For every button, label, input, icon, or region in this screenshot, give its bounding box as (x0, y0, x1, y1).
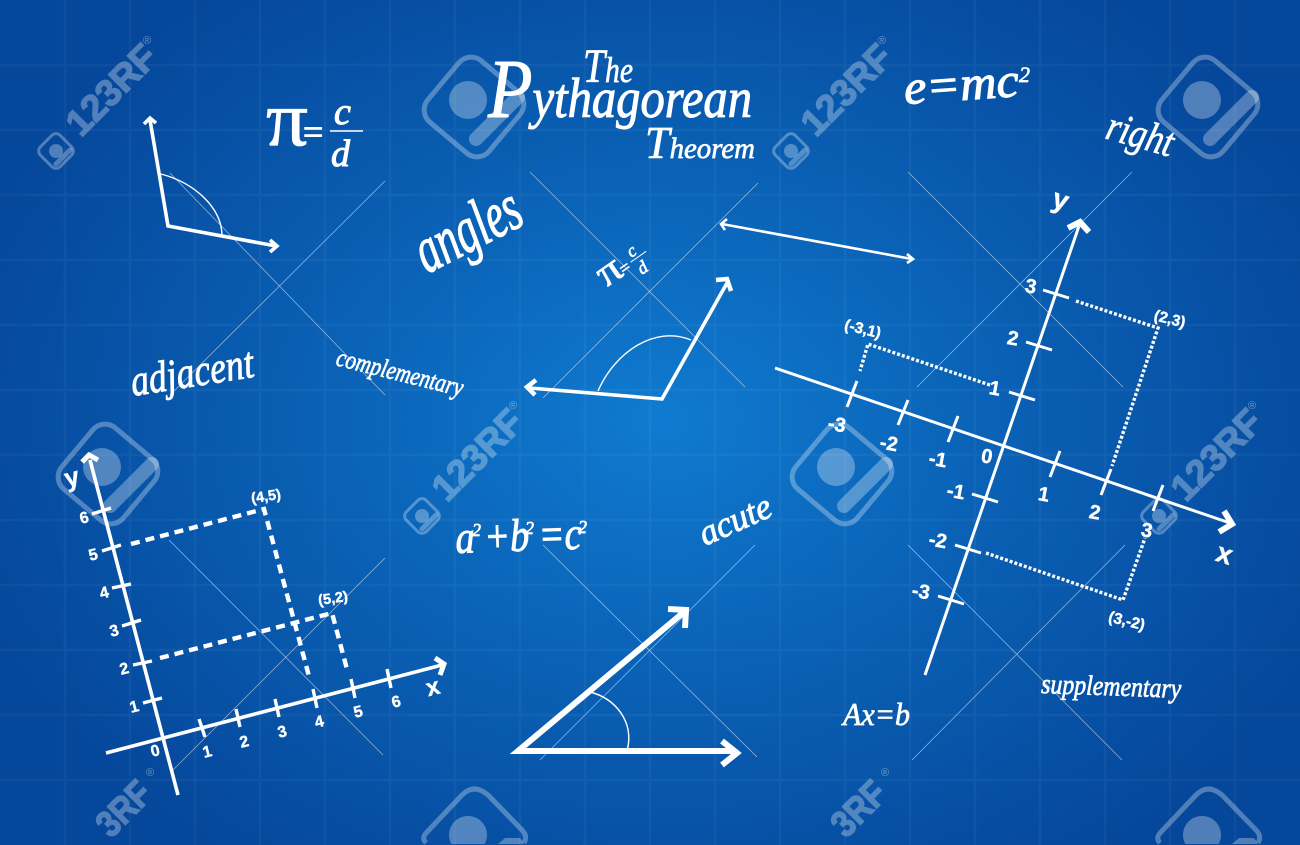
watermark: top left (36, 35, 165, 171)
formula: small rotated pi: π (585, 245, 631, 295)
watermark: middle centre: ® (509, 400, 517, 412)
watermark: middle right: 123RF (1163, 401, 1270, 509)
formula: small rotated pi: c (622, 240, 640, 261)
axis labels left: 5 (87, 546, 100, 565)
watermark: top centre right (771, 35, 900, 171)
coordinate chart left (61, 455, 444, 795)
watermark: top left: ® (143, 35, 151, 47)
axis labels right: -2 (878, 432, 899, 456)
y axis right (925, 226, 1079, 675)
word: angles: angles (401, 171, 534, 287)
x axis left (106, 665, 442, 753)
axis labels right: 1 (987, 377, 1002, 401)
axis labels right: -3 (826, 413, 847, 437)
axis labels right: (2,3) (1152, 307, 1187, 332)
watermark: bottom left: 3RF (88, 773, 160, 845)
dotted guides right (860, 301, 1158, 600)
watermark: middle centre (402, 400, 531, 536)
watermark egg: top right (1152, 51, 1264, 163)
axis labels right: -3 (910, 580, 931, 604)
axis labels right: 0 (979, 445, 994, 469)
watermark: top centre right: ® (878, 35, 886, 47)
axis labels left: 1 (201, 743, 214, 762)
coordinate chart right (775, 182, 1237, 675)
axis labels right: 3 (1023, 275, 1038, 299)
y axis left (90, 460, 178, 795)
axis labels left: 1 (128, 698, 141, 717)
axis labels right: (3,-2) (1107, 609, 1147, 634)
axis labels left: y (61, 461, 83, 493)
watermark egg: middle centre right (786, 418, 898, 530)
watermark: bottom centre right: 3RF (823, 773, 895, 845)
axis labels right: -2 (927, 529, 948, 553)
formula: e = mc squared: 2 (1019, 62, 1030, 87)
watermark: bottom left: ® (146, 767, 154, 779)
axis labels left: 6 (78, 509, 91, 528)
formula: pi = c over d: π (266, 75, 308, 162)
formula: pi = c over d (266, 75, 363, 175)
formula: a squared plus b squared equals c squared: 2 (578, 517, 587, 537)
axis labels right: -1 (927, 448, 948, 472)
axis labels left: (5,2) (317, 589, 349, 609)
watermark: middle right: ® (1248, 400, 1256, 412)
axis labels right (826, 182, 1237, 634)
axis labels right: -1 (945, 480, 966, 504)
long double-headed arrow (721, 219, 913, 263)
formula: a squared plus b squared equals c squared: 2 (525, 518, 534, 538)
axis arrowheads left (82, 455, 444, 675)
watermark: middle right (1139, 400, 1270, 536)
title: Pythagorean (487, 43, 752, 136)
obtuse angle top left (144, 118, 277, 252)
axis labels left: 4 (98, 584, 111, 603)
x axis right (775, 368, 1230, 523)
acute angle bottom (518, 609, 737, 765)
axis labels right: 2 (1005, 327, 1020, 351)
axis labels left: 2 (238, 733, 251, 752)
axis labels right: 1 (1036, 483, 1051, 507)
acute angle centre (527, 279, 731, 399)
axis labels left: 5 (352, 703, 365, 722)
formula: a squared plus b squared equals c squared: a +b =c (455, 508, 582, 563)
axis labels left (61, 461, 443, 762)
word: right: right (1101, 103, 1180, 167)
axis labels right: x (1213, 536, 1237, 571)
axis labels left: 3 (276, 723, 289, 742)
tick marks left (92, 508, 391, 737)
watermark: bottom centre right: ® (881, 767, 889, 779)
axis labels left: 4 (313, 713, 326, 732)
formula: small rotated pi: d (633, 256, 653, 278)
watermark egg: top centre (418, 51, 530, 163)
watermark: top centre right: 123RF (793, 36, 900, 144)
word: adjacent: adjacent (127, 338, 258, 406)
formula: Ax = b: Ax=b (841, 696, 910, 732)
word: supplementary: supplementary (1041, 669, 1182, 705)
formula: pi = c over d: c (334, 91, 351, 133)
formula: pi = c over d: d (331, 133, 351, 175)
axis labels left: 3 (108, 622, 121, 641)
axis labels left: 2 (118, 660, 131, 679)
tick marks right (847, 290, 1163, 604)
axis labels right: y (1049, 182, 1073, 217)
word: complementary: complementary (334, 343, 467, 402)
formula: small rotated pi (585, 228, 658, 299)
watermark: top left: 123RF (58, 36, 165, 144)
title: The (583, 40, 633, 93)
axis labels left: (4,5) (250, 487, 282, 507)
word: acute: acute (692, 486, 778, 553)
axis labels left: 0 (149, 742, 162, 761)
formula: a squared plus b squared equals c squared: 2 (472, 520, 481, 540)
title (487, 40, 755, 168)
title: Theorem (645, 117, 755, 168)
watermark egg: bottom centre (424, 789, 526, 844)
watermark egg: bottom right (1158, 789, 1260, 844)
axis arrowheads right (1068, 222, 1232, 532)
watermark egg: middle left (52, 418, 164, 530)
watermark: middle centre: 123RF (424, 401, 531, 509)
axis labels right: 3 (1139, 519, 1154, 543)
formula: e = mc squared: e=mc (902, 54, 1020, 115)
dashed guides left (131, 509, 348, 680)
formula: pi = c over d: = (303, 112, 323, 152)
formula: small rotated pi: = (615, 256, 635, 279)
axis labels left: x (423, 673, 443, 702)
axis labels left: 6 (390, 693, 403, 712)
axis labels right: (-3,1) (843, 317, 883, 342)
axis labels right: 2 (1087, 501, 1102, 525)
